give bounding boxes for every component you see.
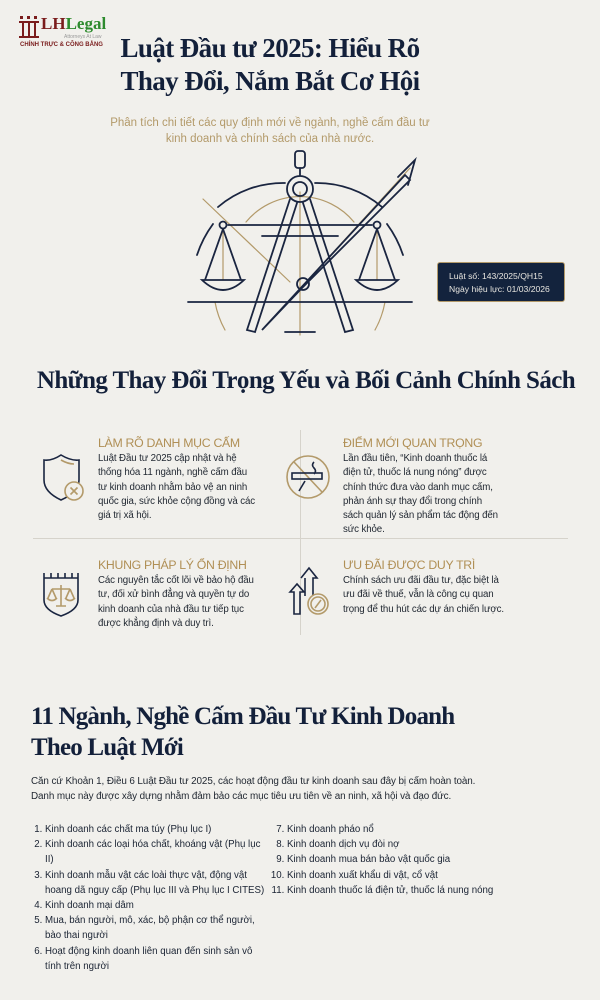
list: items 7-11: Kinh doanh mua bán bảo vật quốc gia bbox=[287, 854, 450, 865]
illustration: compass, scales and arrow bbox=[187, 150, 417, 336]
list: items 7-11 bbox=[272, 824, 493, 896]
intro paragraph: Danh mục này được xây dựng nhằm đảm bảo các mục tiêu ưu tiên về an ninh, xã hội và đạo đức. bbox=[31, 791, 451, 802]
list: items 1-6: Kinh doanh mại dâm bbox=[45, 900, 134, 911]
list: items 1-6: Mua, bán người, mô, xác, bộ phận cơ thể người, bào thai người bbox=[45, 915, 255, 941]
title: LÀM RÕ DANH MỤC CẤM bbox=[98, 436, 240, 450]
subtitle: Phân tích chi tiết các quy định mới về ngành, nghề cấm đầu tư bbox=[110, 117, 430, 129]
title: ƯU ĐÃI ĐƯỢC DUY TRÌ bbox=[343, 558, 475, 572]
title: ĐIỂM MỚI QUAN TRỌNG bbox=[343, 436, 482, 450]
heading: 11 banned sectors: 11 Ngành, Nghề Cấm Đầu Tư Kinh Doanh bbox=[31, 703, 454, 730]
title: KHUNG PHÁP LÝ ỔN ĐỊNH bbox=[98, 558, 247, 572]
text: Các nguyên tắc cốt lõi về bảo hộ đầu tư, đối xử bình đẳng và quyền tự do kinh doanh của nhà đầu tư tiếp tục được khẳng định và duy trì. bbox=[98, 575, 254, 629]
text: Luật Đầu tư 2025 cập nhật và hệ thống hóa 11 ngành, nghề cấm đầu tư kinh doanh nhằm bảo vệ an ninh quốc gia, sức khỏe cộng đồng và các giá trị xã hội. bbox=[98, 453, 255, 521]
callout: law info: Luật số: 143/2025/QH15 bbox=[449, 271, 543, 281]
icon: no smoking bbox=[286, 455, 330, 499]
list: items 7-11: Kinh doanh pháo nổ bbox=[287, 824, 374, 835]
panel: clarify banned list bbox=[43, 436, 255, 521]
callout: law info bbox=[437, 262, 565, 302]
list: items 1-6 bbox=[34, 824, 264, 972]
list: items 1-6: Kinh doanh mẫu vật các loài thực vật, động vật hoang dã nguy cấp (Phụ lục III và Phụ lục I CITES) bbox=[45, 870, 264, 896]
icon: shield with x bbox=[43, 454, 84, 501]
panel: incentives maintained bbox=[288, 558, 504, 615]
logo: CHÍNH TRỰC & CÔNG BẰNG bbox=[20, 42, 103, 48]
list: items 7-11: Kinh doanh thuốc lá điện tử, thuốc lá nung nóng bbox=[287, 885, 493, 896]
callout: law info: Ngày hiệu lực: 01/03/2026 bbox=[449, 284, 550, 294]
subtitle bbox=[110, 116, 430, 145]
icon: castle shield with scales bbox=[43, 573, 79, 617]
icon: arrows up with percent bbox=[288, 566, 329, 615]
logo: Attorneys At Law bbox=[64, 34, 102, 40]
icon: logo mark bbox=[19, 16, 39, 38]
panel: important new point bbox=[286, 436, 498, 535]
heading: changes section: Những Thay Đổi Trọng Yếu và Bối Cảnh Chính Sách bbox=[37, 367, 575, 394]
subtitle: kinh doanh và chính sách của nhà nước. bbox=[166, 133, 374, 145]
list: items 1-6: Hoạt động kinh doanh liên quan đến sinh sản vô tính trên người bbox=[45, 946, 252, 972]
heading: 11 banned sectors: Theo Luật Mới bbox=[31, 734, 183, 761]
panel: stable legal framework bbox=[43, 558, 254, 629]
list: items 7-11: Kinh doanh xuất khẩu di vật, cổ vật bbox=[287, 870, 438, 881]
intro paragraph: Căn cứ Khoản 1, Điều 6 Luật Đầu tư 2025, các hoạt động đầu tư kinh doanh sau đây bị cấm hoàn toàn. bbox=[31, 776, 475, 787]
list: items 7-11: Kinh doanh dịch vụ đòi nợ bbox=[287, 839, 399, 850]
logo bbox=[19, 14, 106, 48]
intro paragraph bbox=[31, 776, 475, 802]
text: Chính sách ưu đãi đầu tư, đặc biệt là ưu đãi về thuế, vẫn là công cụ quan trọng để thu hút các dự án chiến lược. bbox=[343, 575, 504, 615]
list: items 1-6: Kinh doanh các loại hóa chất, khoáng vật (Phụ lục II) bbox=[45, 839, 260, 865]
logo text: LHLegal bbox=[41, 14, 106, 33]
title: Luật Đầu tư 2025: Hiểu Rõ bbox=[121, 33, 419, 63]
text: Lần đầu tiên, “Kinh doanh thuốc lá điện tử, thuốc lá nung nóng” được chính thức đưa vào danh mục cấm, phản ánh sự thay đổi trong chính sách quản lý sản phẩm tác động đến sức khỏe. bbox=[343, 453, 498, 535]
title: Thay Đổi, Nắm Bắt Cơ Hội bbox=[120, 66, 420, 96]
heading: 11 banned sectors bbox=[31, 703, 455, 761]
list: items 1-6: Kinh doanh các chất ma túy (Phụ lục I) bbox=[45, 824, 211, 835]
title bbox=[120, 33, 420, 96]
